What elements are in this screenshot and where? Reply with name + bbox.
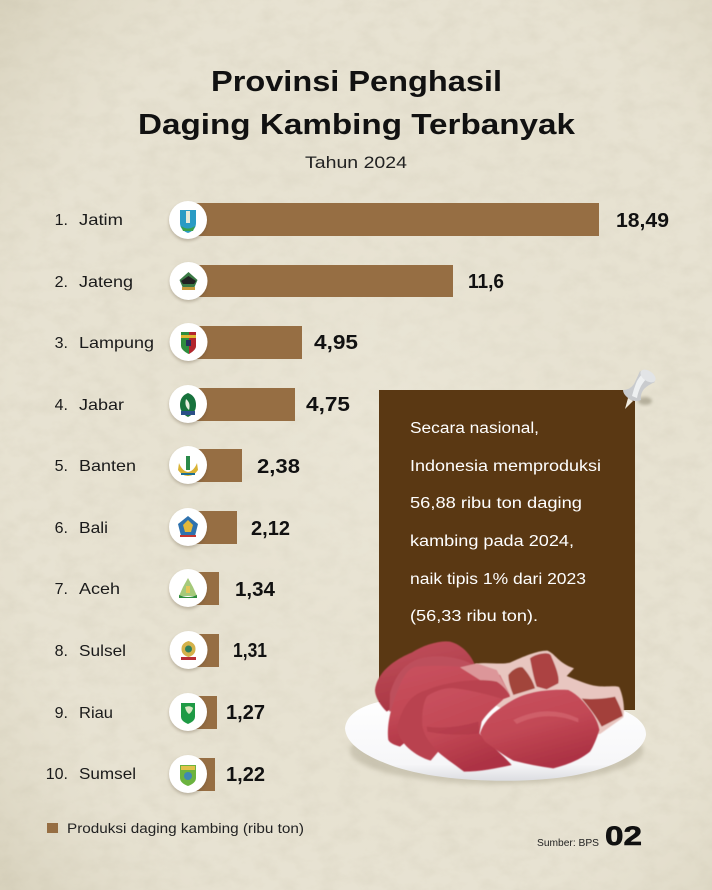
row 1: Jatim: Jatim: [79, 212, 123, 229]
row 10: Sumsel: 1,22: [226, 764, 265, 786]
row 3: Lampung: Lampung: [79, 335, 154, 352]
row 3: Lampung: 3.: [55, 335, 68, 352]
row 6: Bali: 2,12: [251, 518, 290, 540]
legend: Produksi daging kambing (ribu ton): [67, 821, 304, 836]
row 7: Aceh: 1,34: [235, 579, 276, 601]
row 5: Banten: [55, 446, 300, 486]
row 8: Sulsel: Sulsel: [79, 643, 126, 660]
summary text: Secara nasional,: [410, 420, 539, 437]
title: [138, 66, 576, 141]
icon: push pin: [623, 367, 658, 409]
row 9: Riau: [55, 693, 265, 733]
row 6: Bali: [55, 508, 290, 548]
row 1: Jatim: 1.: [55, 212, 68, 229]
bar chart: [46, 201, 669, 795]
row 3: Lampung: [55, 323, 358, 363]
row 2: Jateng: 11,6: [468, 271, 504, 293]
panel: national summary: [379, 390, 635, 710]
row 8: Sulsel: 8.: [55, 643, 68, 660]
summary text: kambing pada 2024,: [410, 533, 574, 550]
subtitle: Tahun 2024: [305, 153, 407, 172]
bone-in cut: [475, 651, 624, 734]
row 4: Jabar: Jabar: [79, 397, 125, 414]
row 4: Jabar: [55, 385, 350, 425]
row 2: Jateng: Jateng: [79, 274, 133, 291]
row 4: Jabar: 4,75: [306, 394, 350, 416]
meat plate illustration: [345, 641, 646, 784]
row 2: Jateng: [55, 262, 504, 302]
row 7: Aceh: Aceh: [79, 581, 120, 598]
plate: [345, 698, 646, 784]
meat slices: [375, 641, 599, 772]
row 5: Banten: 5.: [55, 458, 68, 475]
row 7: Aceh: [55, 569, 276, 609]
row 9: Riau: 1,27: [226, 702, 265, 724]
page number: 02: [605, 821, 642, 851]
summary text: (56,33 ribu ton).: [410, 608, 538, 625]
row 5: Banten: 2,38: [257, 456, 300, 478]
row 6: Bali: Bali: [79, 520, 108, 537]
summary text: 56,88 ribu ton daging: [410, 495, 582, 512]
row 1: Jatim: 18,49: [616, 210, 669, 232]
row 6: Bali: 6.: [55, 520, 68, 537]
source: Sumber: BPS: [537, 837, 599, 849]
row 1: Jatim: [55, 201, 669, 241]
row 10: Sumsel: 10.: [46, 766, 68, 783]
row 8: Sulsel: 1,31: [233, 640, 267, 662]
summary text: Indonesia memproduksi: [410, 458, 601, 475]
row 9: Riau: Riau: [79, 705, 113, 722]
row 8: Sulsel: [55, 631, 267, 671]
row 7: Aceh: 7.: [55, 581, 68, 598]
row 4: Jabar: 4.: [55, 397, 68, 414]
row 10: Sumsel: Sumsel: [79, 766, 136, 783]
title: Provinsi Penghasil: [211, 66, 502, 98]
row 3: Lampung: 4,95: [314, 332, 358, 354]
row 10: Sumsel: [46, 755, 265, 795]
summary text: [410, 420, 601, 625]
title: Daging Kambing Terbanyak: [138, 109, 576, 141]
row 2: Jateng: 2.: [55, 274, 68, 291]
row 5: Banten: Banten: [79, 458, 136, 475]
row 9: Riau: 9.: [55, 705, 68, 722]
summary text: naik tipis 1% dari 2023: [410, 571, 586, 588]
